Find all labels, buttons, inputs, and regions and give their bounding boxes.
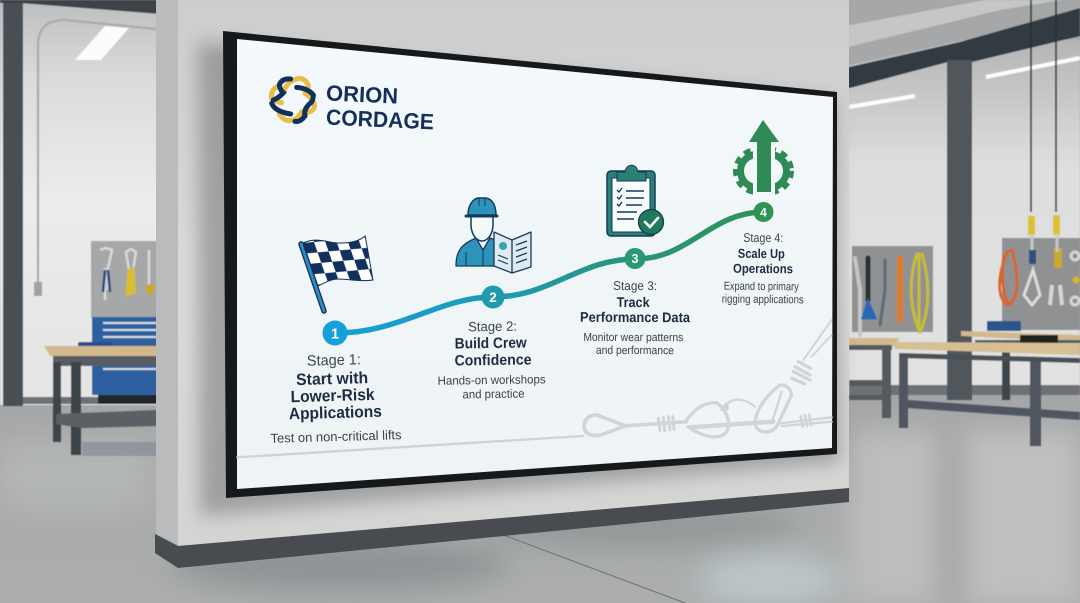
screen face: [237, 39, 833, 489]
stage 4 label: Stage 4:: [743, 231, 783, 245]
stage 3 label: Stage 3:: [613, 279, 657, 293]
side bench top: [849, 338, 900, 345]
small sling: [148, 250, 150, 285]
left ceiling beam: [0, 0, 160, 14]
main right bench: [889, 342, 1080, 446]
right wall skirting: [849, 385, 1080, 395]
yellow strands: [271, 78, 314, 121]
baseline rope: [237, 436, 583, 457]
silver rigging: [855, 258, 860, 335]
arrow head: [720, 404, 728, 411]
bench top: [44, 346, 157, 356]
bench apron: [899, 353, 1080, 363]
feature wall side face: [156, 0, 178, 545]
step 3 marker: 3: [632, 252, 639, 266]
stage 1 description: Test on non-critical lifts: [270, 427, 402, 446]
yellow rope coil: [911, 254, 928, 332]
board: [607, 171, 655, 236]
hardware: [1071, 252, 1079, 260]
yellow sling: [126, 249, 136, 270]
back bench: [961, 331, 1080, 400]
back bench frame: [1002, 343, 1010, 400]
rope eye: [584, 415, 623, 435]
screen frame: [223, 31, 837, 498]
hoist yellow blocks: [1028, 215, 1060, 235]
step 3 marker: [624, 248, 646, 269]
cabinet base: [98, 395, 157, 404]
manual spine: [511, 240, 513, 273]
orange rope coil: [1000, 250, 1017, 305]
rope line art: [237, 320, 832, 457]
check badge: [638, 210, 664, 234]
stage 1 title: Lower-Risk: [290, 386, 376, 406]
bench legs: [53, 362, 81, 455]
stage 3 description: Monitor wear patterns: [583, 332, 684, 344]
hat ridge: [479, 198, 485, 206]
bench top: [889, 342, 1080, 355]
gloves on bench: [1020, 335, 1058, 346]
hoist hooks: [1032, 236, 1057, 252]
pegboard two: [1002, 238, 1080, 330]
left gear: [733, 148, 753, 195]
grey rigging: [880, 260, 885, 325]
step 1 marker: 1: [331, 326, 339, 342]
rope run right: [780, 417, 832, 426]
left room wall: [0, 0, 160, 405]
ventilation duct: [845, 0, 1062, 48]
carabiner: [755, 385, 792, 432]
right room walls: [845, 40, 1080, 395]
worker face: [471, 215, 493, 241]
stage 4 title: Scale Up: [738, 246, 785, 261]
logo: [271, 78, 435, 134]
board two gear: [1000, 248, 1080, 305]
electrical box: [34, 282, 42, 296]
rope wrap right: [801, 415, 811, 427]
ceiling deck: [845, 0, 1080, 66]
stage 2 text: [437, 318, 549, 402]
tool on bench: [78, 342, 113, 348]
paper: [612, 178, 650, 232]
manual photo: [499, 242, 507, 250]
wall skirting: [23, 397, 160, 404]
pegboard: [91, 241, 157, 318]
right gear: [775, 148, 794, 194]
left workshop room: [0, 0, 160, 456]
right workshop room: [845, 0, 1080, 446]
ceiling lights: [849, 96, 915, 107]
bench legs and shelf: [899, 356, 1080, 446]
upward ropes: [803, 320, 832, 360]
icon: checkered flag: [301, 236, 373, 311]
stage 1 title: Applications: [289, 403, 382, 423]
flag cloth: [303, 236, 373, 286]
hat brim: [466, 214, 497, 218]
rope run left: [623, 422, 687, 426]
manual lines: [498, 241, 527, 264]
hanging slings: [100, 248, 154, 300]
left bench: [44, 346, 157, 456]
stage 2 title: Confidence: [454, 351, 532, 370]
stage 3 text: [580, 279, 690, 357]
side bench: [849, 338, 900, 418]
back bench top: [961, 331, 1080, 342]
hoist cables: [1031, 0, 1056, 212]
left steel column: [3, 3, 23, 406]
orange rigging: [897, 258, 903, 320]
stage 4 text: [722, 231, 805, 306]
ORION: ORION: [326, 80, 399, 109]
blue sling: [100, 248, 112, 300]
stage 4 description: Expand to primary: [724, 281, 799, 293]
stage 1 label: Stage 1:: [307, 351, 361, 370]
worker body: [456, 238, 502, 266]
rope through knot: [690, 422, 773, 427]
arrow: [749, 120, 779, 192]
stage 3 title: Performance Data: [580, 309, 690, 325]
floor reflections: [0, 430, 1080, 603]
badge tick: [645, 218, 658, 227]
side bench frame: [849, 345, 892, 418]
logo wordmark: [326, 80, 435, 134]
stage 3 title: Track: [617, 294, 650, 310]
pegboard one: [852, 246, 933, 332]
step 2 marker: 2: [489, 290, 497, 305]
display screen: [223, 31, 837, 498]
floor seam: [498, 533, 685, 603]
rope wrap left: [658, 417, 674, 431]
stage 1 text: [268, 350, 402, 446]
icon: worker with manual: [456, 198, 531, 273]
flag pole: [301, 244, 324, 311]
step 1 marker: [322, 320, 348, 346]
screen shadow: [198, 42, 840, 516]
stage 1 title: Start with: [296, 369, 368, 389]
bench shelf: [56, 410, 157, 428]
blue tool cabinet: [92, 317, 157, 395]
wall baseboard: [155, 488, 849, 568]
logo knot mark: [271, 78, 314, 122]
step 4 marker: 4: [760, 206, 767, 220]
clip: [617, 165, 646, 181]
board one gear: [855, 254, 928, 335]
check items: [617, 188, 622, 206]
step 2 marker: [482, 286, 504, 308]
stage 3 description: and performance: [596, 345, 674, 357]
feature wall: [178, 0, 849, 546]
steel column: [947, 60, 972, 400]
conduit pipe: [38, 20, 157, 285]
stage 2 title: Build Crew: [455, 335, 527, 353]
open manual: [494, 232, 531, 273]
arrow curve: [722, 400, 755, 408]
stage 4 description: rigging applications: [722, 294, 804, 306]
coil on upward rope: [792, 362, 811, 384]
icon: clipboard checklist: [607, 165, 664, 236]
ceiling light: [75, 26, 129, 60]
blue case: [987, 321, 1021, 331]
blue rigging: [866, 258, 870, 300]
stage 2 description: Hands-on workshops: [438, 372, 546, 388]
CORDAGE: CORDAGE: [326, 105, 435, 134]
central knot: [687, 403, 729, 437]
bench apron: [53, 356, 157, 366]
inner carabiner bar: [772, 392, 782, 423]
stage 4 title: Operations: [733, 261, 793, 276]
list lines: [617, 191, 644, 219]
hard hat: [468, 198, 496, 215]
jacket seams: [466, 250, 483, 266]
icon: gears with up arrow: [736, 120, 792, 192]
navy strands: [272, 79, 313, 122]
floor: [0, 395, 1080, 603]
ceiling beams: [845, 8, 1080, 88]
cabinet drawers: [103, 323, 157, 369]
stage 2 label: Stage 2:: [468, 319, 517, 334]
step 4 marker: [754, 202, 774, 222]
carabiner: [1024, 270, 1040, 305]
stage path: [336, 212, 764, 333]
stage 2 description: and practice: [462, 387, 525, 401]
